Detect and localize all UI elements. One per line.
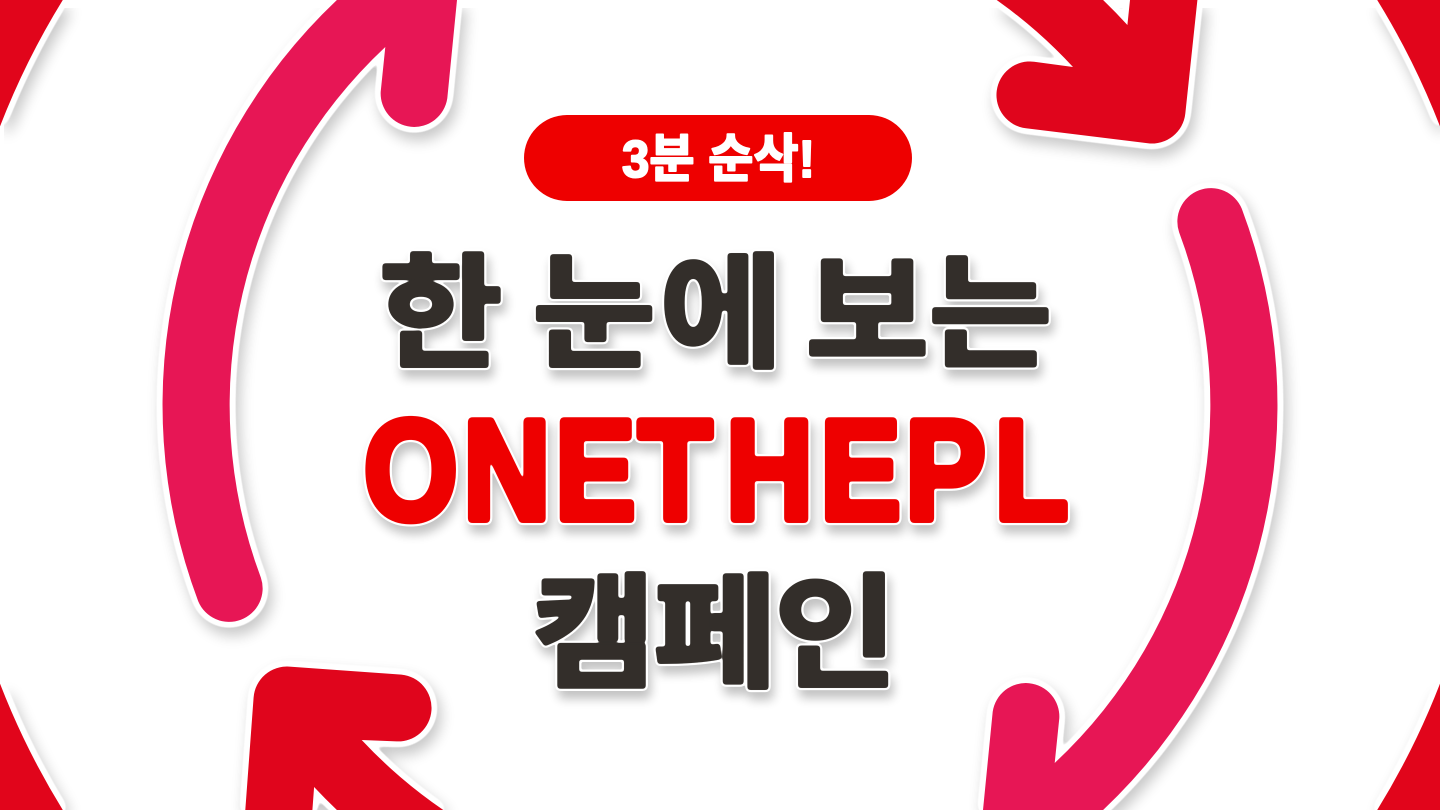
- title line 1: 한 눈에 보는: 한 눈에 보는: [379, 246, 1052, 384]
- badge pill: 3분 순삭!: 3분 순삭!: [622, 131, 815, 189]
- arrow: right pink arc: [983, 188, 1277, 810]
- title line 2: ONETHEPL: ONETHEPL: [364, 391, 1068, 549]
- title line 3: 캠페인: 캠페인: [532, 566, 898, 704]
- arrow: top red arc: [996, 0, 1197, 144]
- arrow: bottom red arc: [245, 667, 443, 810]
- badge pill: 3분 순삭!: [524, 115, 912, 201]
- arrow: left pink arc: [163, 0, 457, 622]
